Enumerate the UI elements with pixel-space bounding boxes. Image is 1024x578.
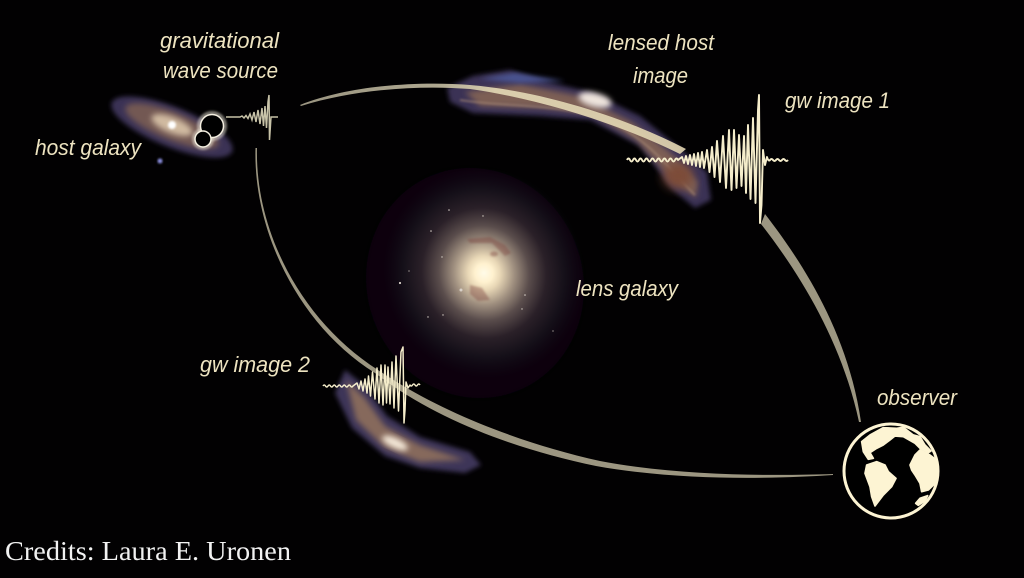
dust lanes — [467, 237, 511, 301]
label: lensed host image — [608, 30, 715, 88]
host galaxy — [104, 84, 240, 170]
label: lensed host image: lensed host — [608, 30, 715, 55]
field stars — [399, 209, 554, 332]
gw image 2 waveform — [323, 347, 420, 423]
label: gravitational wave source: wave source — [163, 58, 278, 83]
gw image 1 waveform — [627, 95, 788, 223]
label: host galaxy: host galaxy — [35, 135, 143, 160]
label: observer: observer — [877, 385, 959, 410]
light path: source to gw image 2 to observer — [255, 148, 833, 478]
label: gw image 1: gw image 1 — [785, 88, 890, 113]
label: gravitational wave source: gravitational — [160, 28, 280, 53]
light path: source to gw image 1 — [300, 84, 686, 154]
label: gw image 2: gw image 2 — [200, 352, 310, 377]
lensed host image 2 — [335, 370, 481, 473]
source waveform — [226, 95, 278, 140]
label: lensed host image: image — [633, 63, 688, 88]
lensed host image 1 — [447, 70, 711, 208]
black holes binary — [192, 111, 227, 150]
label: lens galaxy: lens galaxy — [576, 276, 680, 301]
icon: earth observer — [844, 424, 938, 518]
credits: Credits: Laura E. Uronen — [5, 536, 292, 566]
label: gravitational wave source — [160, 28, 280, 83]
lens galaxy — [334, 137, 616, 429]
light path: gw image 1 to observer — [761, 214, 861, 422]
